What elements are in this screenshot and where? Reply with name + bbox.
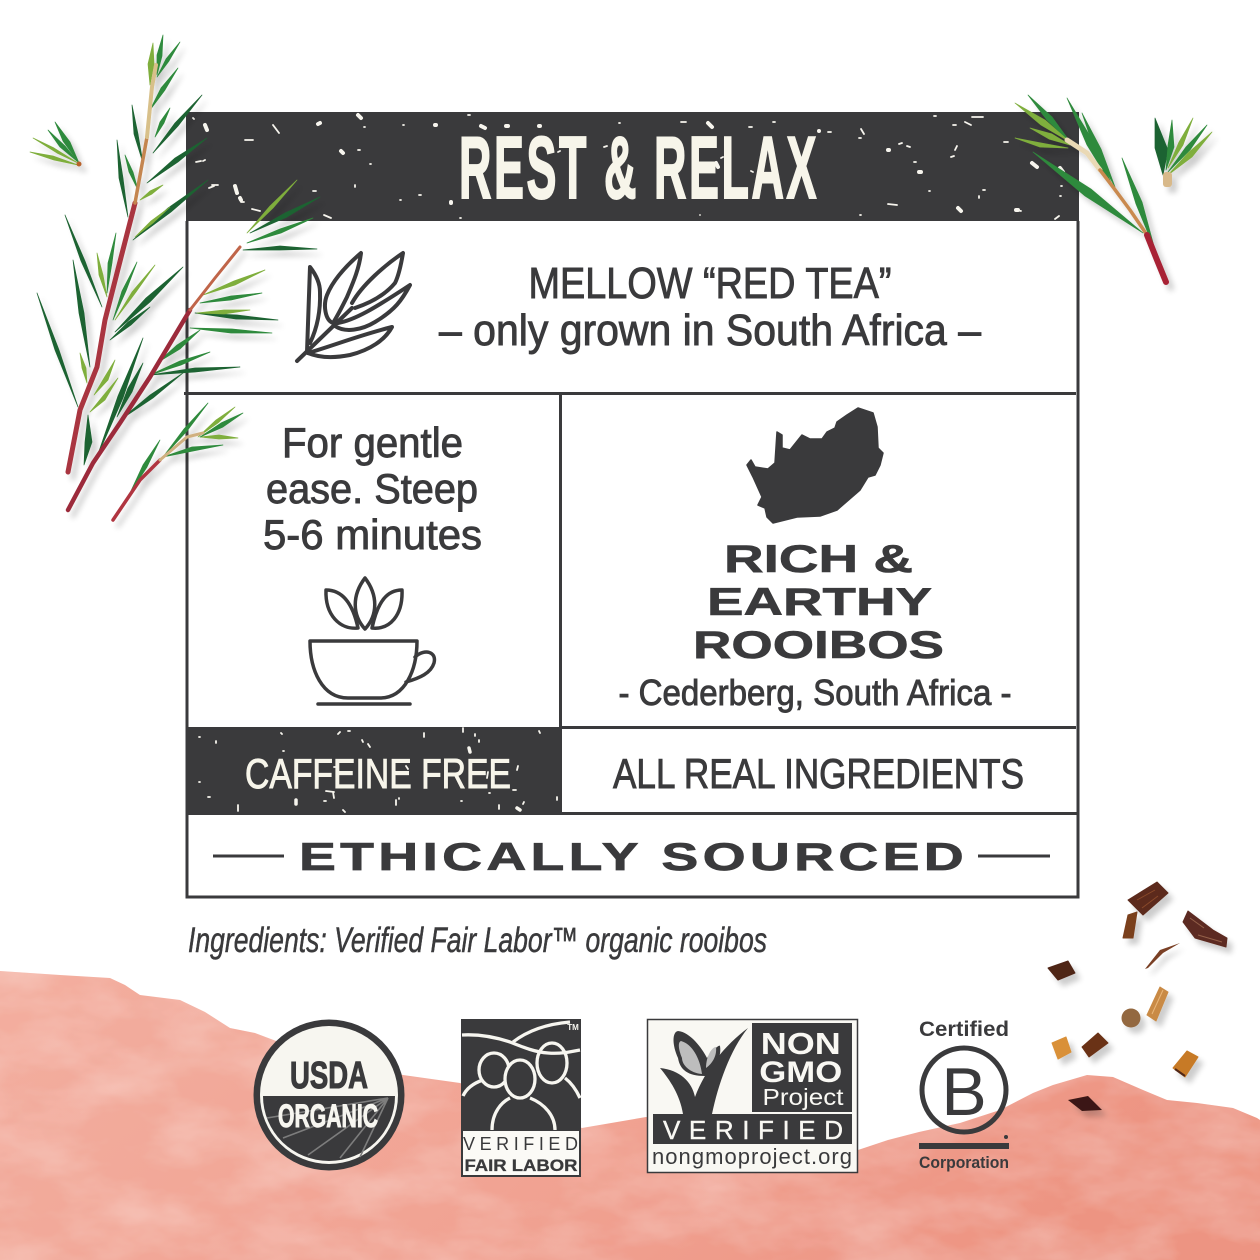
illustration: rooibos sprigs right (1015, 95, 1212, 282)
text: verified: VERIFIED (463, 1134, 578, 1154)
text: TM: TM (567, 1023, 579, 1032)
text: organic: ORGANIC (278, 1098, 378, 1134)
label: ethically sourced: ETHICALLY SOURCED (299, 836, 968, 879)
cell: steeping instructions (263, 419, 490, 704)
heading: mellow red tea: MELLOW “RED TEA” (528, 259, 892, 308)
row: mellow red tea (297, 253, 981, 361)
text: website: nongmoproject.org (652, 1144, 852, 1169)
heading: rich and earthy rooibos: ROOIBOS (693, 624, 944, 667)
text: certified: Certified (919, 1018, 1009, 1041)
text: non gmo project: Project (762, 1084, 844, 1110)
heading: rich and earthy rooibos: RICH & (724, 538, 913, 581)
badges row (254, 1018, 1009, 1176)
background: pink torn paper band (0, 971, 1260, 1260)
badge: non GMO project (648, 1020, 858, 1172)
sprig: main (37, 35, 208, 472)
text: steeping: For gentle (282, 419, 463, 466)
text: fair labor: FAIR LABOR (464, 1156, 578, 1175)
text: non gmo project: NON (761, 1026, 841, 1061)
text: corporation: Corporation (919, 1153, 1009, 1172)
text: B: B (941, 1054, 987, 1130)
cell: caffeine free (187, 727, 561, 813)
icon: tea cup (310, 578, 434, 704)
text: steeping: ease. Steep (266, 465, 478, 512)
badge: certified B corporation (919, 1018, 1009, 1172)
sprig: second (68, 180, 320, 510)
label: caffeine free: CAFFEINE FREE (245, 750, 511, 797)
icon: map of South Africa (747, 408, 883, 523)
icon: rooibos leaf (297, 253, 410, 361)
sprig: third (113, 403, 243, 520)
text: verified: VERIFIED (663, 1115, 843, 1145)
text: Cederberg: - Cederberg, South Africa - (618, 672, 1012, 713)
text: steeping: 5-6 minutes (263, 511, 482, 558)
illustration: rooibos sprigs left (30, 35, 320, 520)
illustration: rooibos tea pieces (1048, 882, 1227, 1111)
heading: rich and earthy rooibos: EARTHY (707, 581, 932, 624)
cell: origin (618, 408, 1012, 713)
panel: product facts table (184, 112, 1079, 897)
text: USDA: USDA (290, 1055, 368, 1097)
badge: verified fair labor (462, 1020, 580, 1176)
text: ingredients: Ingredients: Verified Fair Labor™ organic rooibos (188, 921, 767, 960)
text: non gmo project: GMO (759, 1056, 842, 1089)
title: REST & RELAX (459, 118, 819, 217)
sprig: small top left (30, 122, 82, 166)
icon: butterfly plant (660, 1028, 748, 1114)
badge: USDA organic (254, 1020, 404, 1170)
banner: rest and relax (186, 112, 1079, 221)
text: only grown in South Africa: – only grown in South Africa – (439, 306, 981, 355)
table borders (184, 221, 1078, 897)
sprig: small top right (1155, 118, 1212, 187)
sprig: right (1015, 95, 1166, 282)
label: all real ingredients: ALL REAL INGREDIENTS (613, 750, 1024, 797)
